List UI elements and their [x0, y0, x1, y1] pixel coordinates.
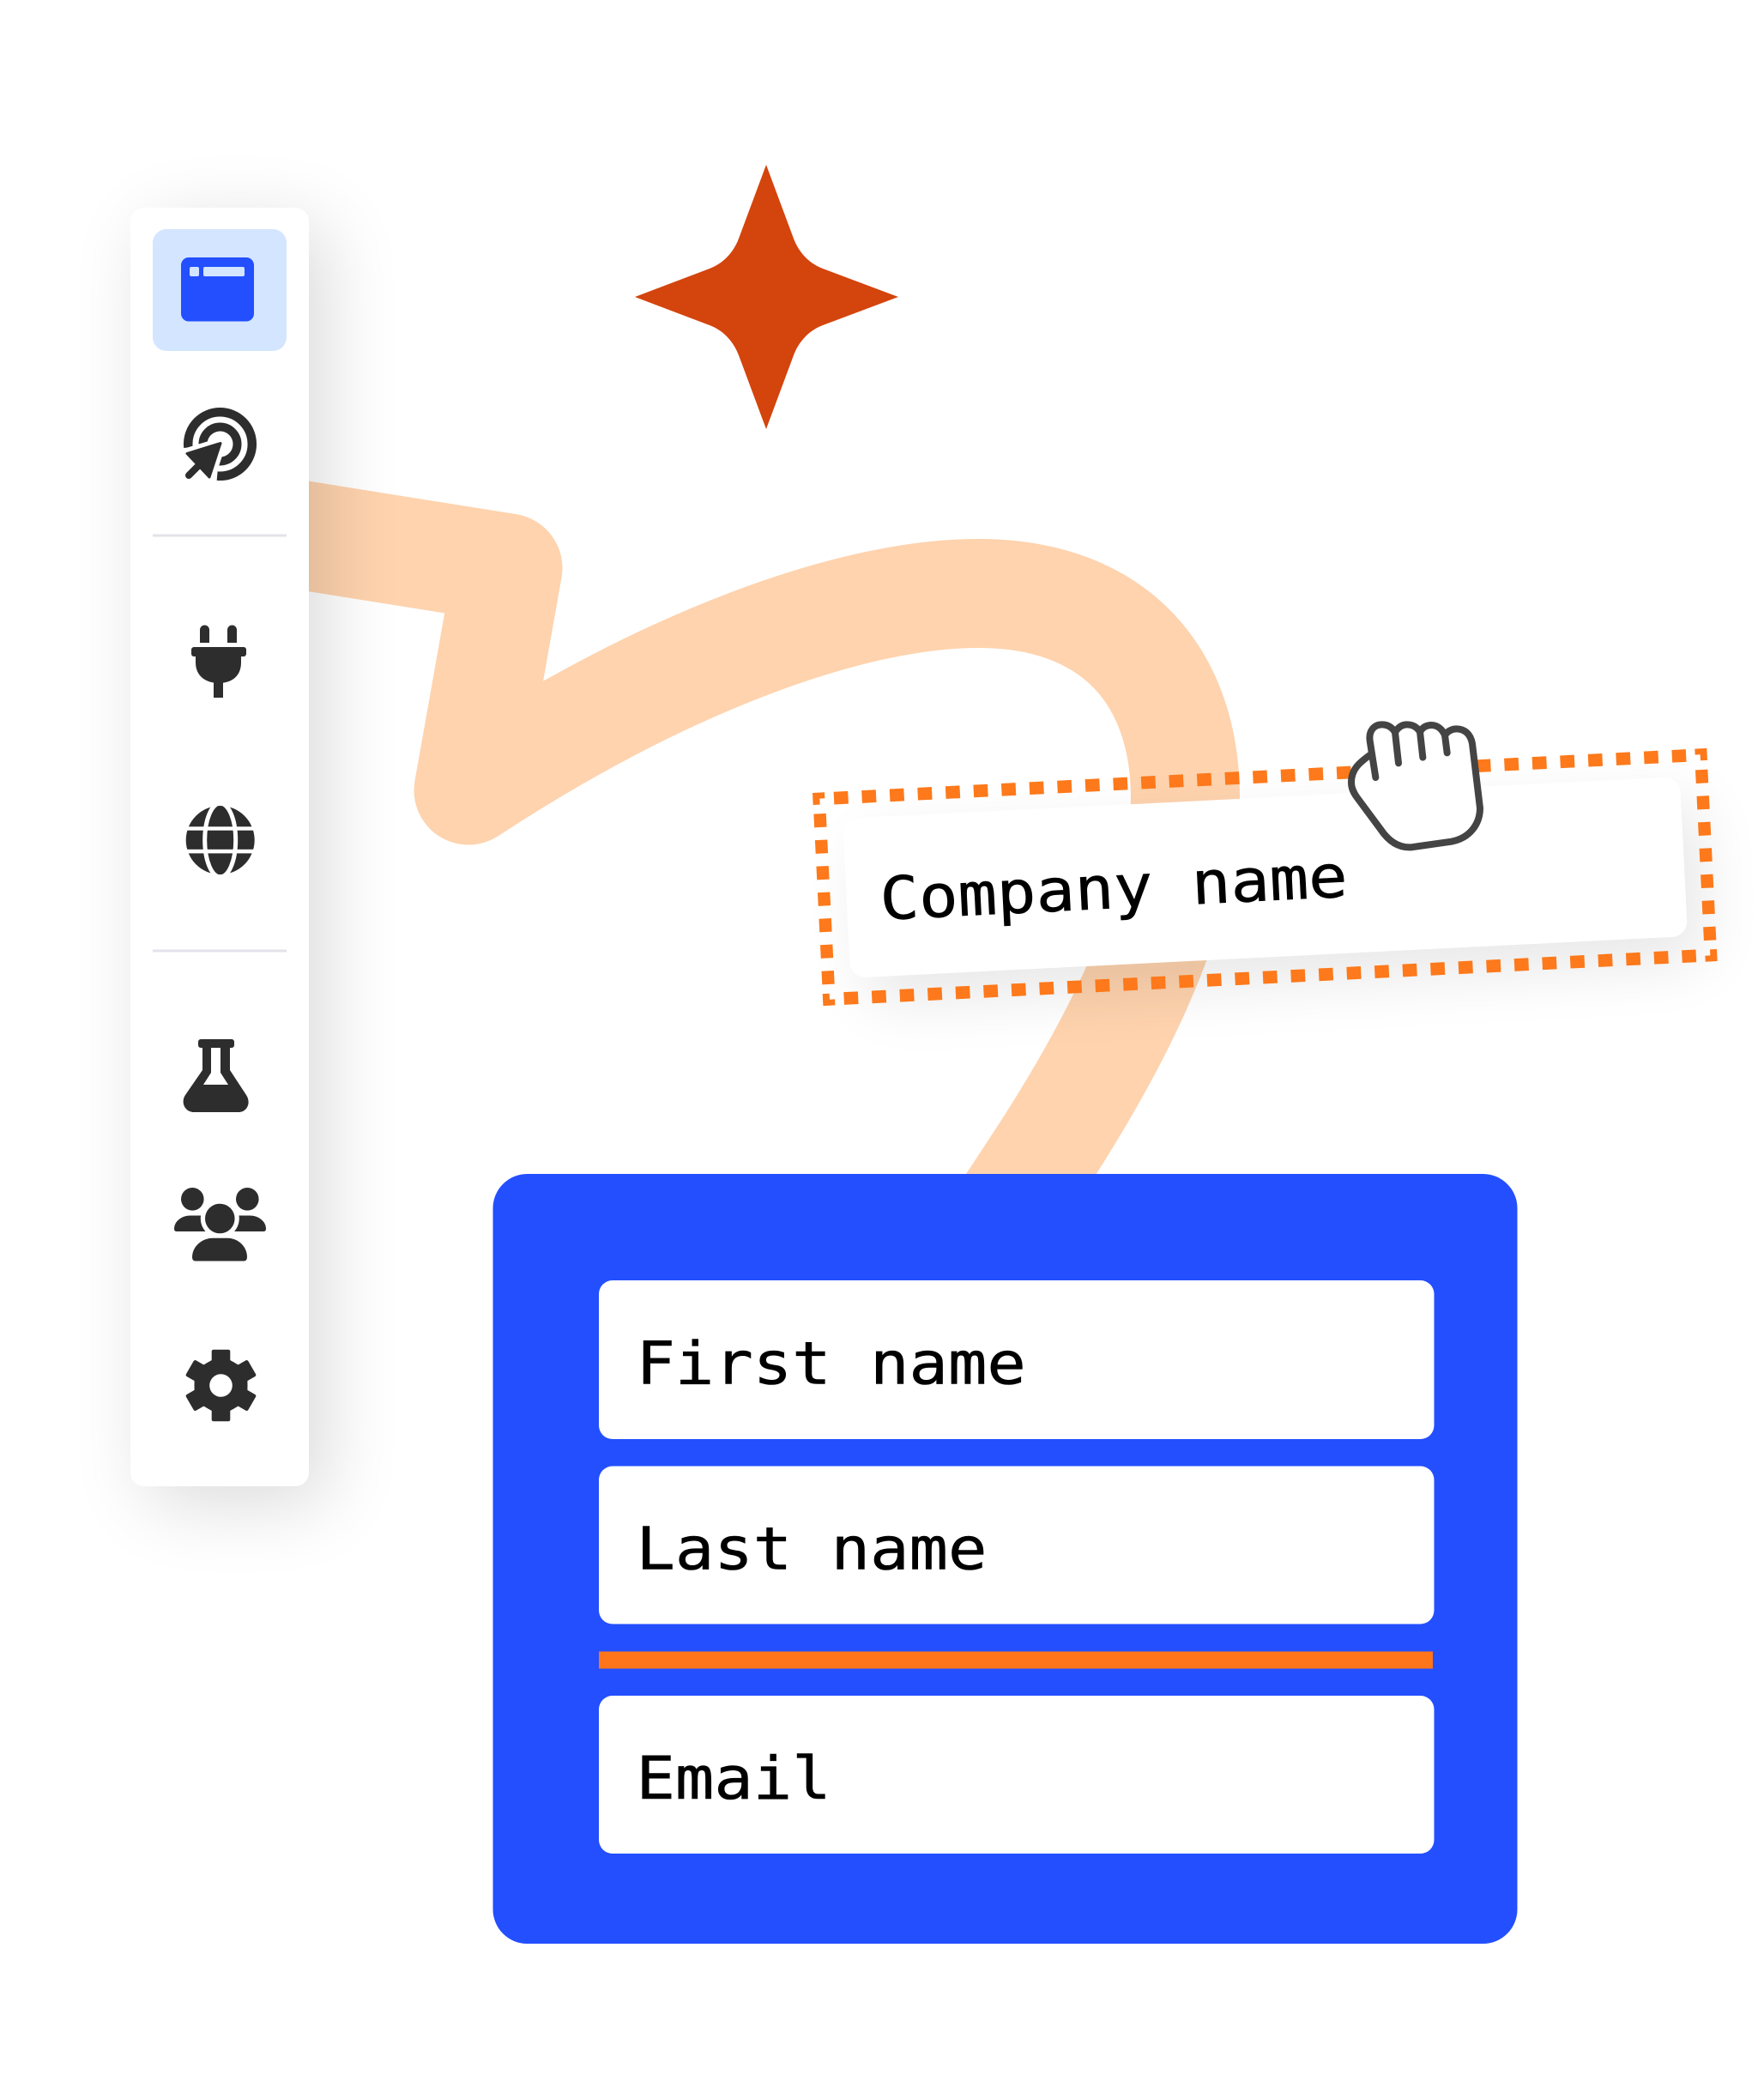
- star: orange-red four-point sparkle: [635, 165, 898, 429]
- icon: flask: [184, 1039, 249, 1112]
- icon: grabbing hand cursor: [1351, 724, 1480, 847]
- field: first name: [599, 1280, 1435, 1439]
- field: last name: [599, 1466, 1435, 1624]
- field: last name: Last name: [637, 1515, 987, 1584]
- icon: plug: [191, 625, 246, 698]
- panel: blue form: [492, 1174, 1517, 1944]
- field: email: [599, 1696, 1435, 1854]
- icon: target with cursor: [176, 412, 252, 496]
- active item highlight with browser icon: [153, 229, 287, 351]
- company name card: Company name: [879, 843, 1349, 935]
- company name card: [843, 777, 1688, 978]
- ribbon: peach connector path: [257, 528, 1186, 1229]
- icon: group of people: [174, 1188, 266, 1261]
- panel: dragged company name field: [813, 748, 1718, 1006]
- dashed drop outline: [813, 748, 1718, 1006]
- drop indicator: orange bar: [599, 1651, 1433, 1668]
- icon: globe: [184, 803, 257, 877]
- icon: settings gear: [181, 1350, 261, 1421]
- field: first name: First name: [637, 1330, 1026, 1399]
- field: email: Email: [637, 1745, 831, 1813]
- panel: sidebar navigation: [130, 208, 326, 1503]
